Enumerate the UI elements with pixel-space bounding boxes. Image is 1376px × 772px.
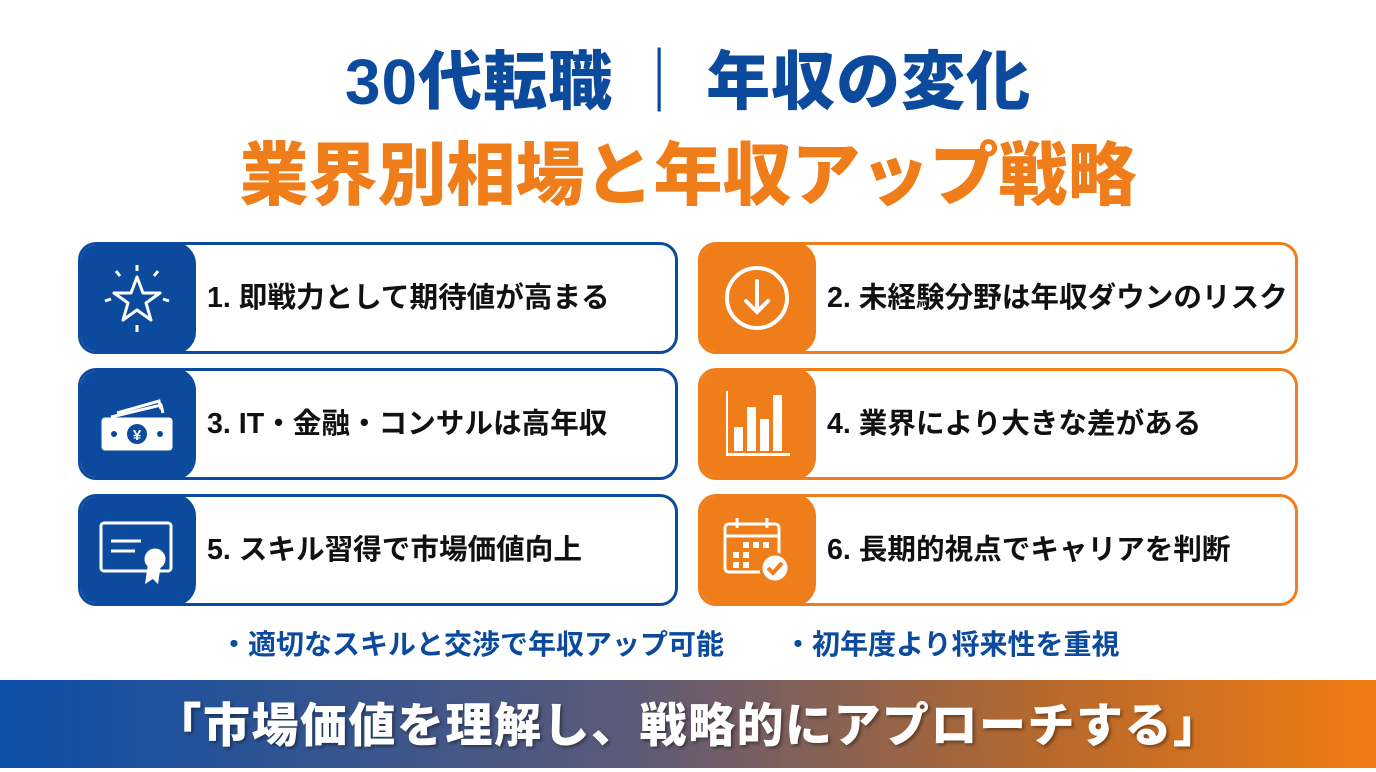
card 6 — [698, 494, 1298, 606]
title: ｜ — [627, 46, 692, 118]
bullet left: ・適切なスキルと交渉で年収アップ可能 — [220, 629, 724, 660]
icon: money — [78, 368, 196, 480]
card 5 — [78, 494, 678, 606]
card 1 — [78, 242, 678, 354]
icon: certificate — [78, 494, 196, 606]
text: 6. 長期的視点でキャリアを判断 — [827, 534, 1231, 566]
card 3 — [78, 368, 678, 480]
icon: money: ¥ — [133, 427, 142, 444]
text: 5. スキル習得で市場価値向上 — [207, 534, 582, 566]
text: 4. 業界により大きな差がある — [827, 408, 1201, 440]
icon: calendar check — [698, 494, 816, 606]
icon: down arrow circle — [698, 242, 816, 354]
bullet right: ・初年度より将来性を重視 — [784, 629, 1119, 660]
banner — [0, 680, 1376, 768]
card 4 — [698, 368, 1298, 480]
icon: bar chart — [698, 368, 816, 480]
subtitle: 業界別相場と年収アップ戦略 — [240, 137, 1136, 214]
text: 2. 未経験分野は年収ダウンのリスク — [827, 282, 1288, 314]
title: 30代転職 年収の変化 — [345, 46, 1031, 118]
text: 1. 即戦力として期待値が高まる — [207, 282, 610, 314]
card 2 — [698, 242, 1298, 354]
icon: star — [78, 242, 196, 354]
text: 3. IT・金融・コンサルは高年収 — [207, 408, 607, 440]
banner: 「市場価値を理解し、戦略的にアプローチする」 — [154, 699, 1222, 752]
